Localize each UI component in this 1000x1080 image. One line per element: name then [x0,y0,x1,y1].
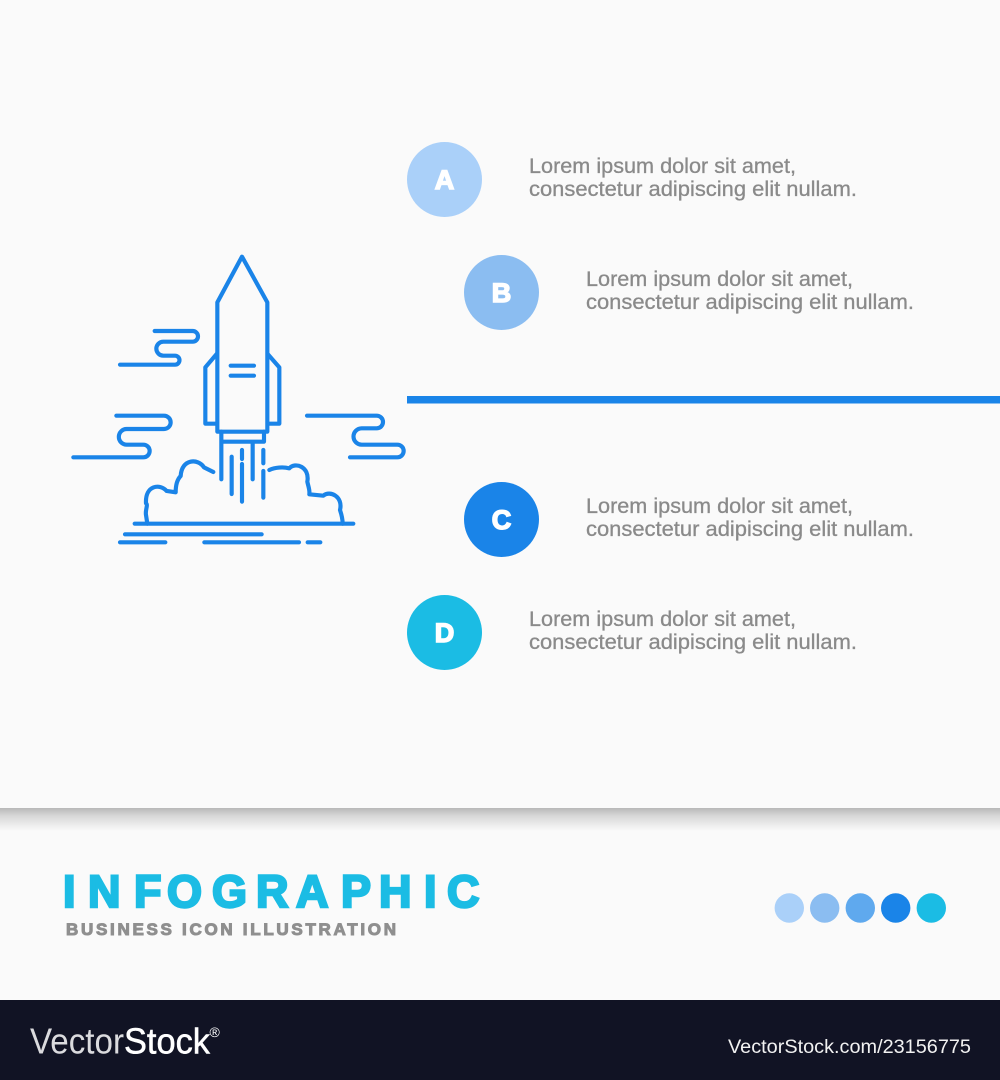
badge A [407,142,482,217]
ground lines [120,524,353,542]
text A: consectetur adipiscing elit nullam. [529,178,857,201]
rocket body [217,257,267,432]
colour dots [775,893,946,923]
text B: Lorem ipsum dolor sit amet, [586,268,853,291]
badge D: D [435,618,454,648]
text D: Lorem ipsum dolor sit amet, [529,608,796,631]
icon: rocket launch [73,257,404,542]
footer logo: ® [210,1024,220,1040]
item B [464,255,914,330]
rocket window lines [231,366,254,376]
footer logo: Vector [30,1020,124,1062]
footer url: VectorStock.com/23156775 [728,1036,971,1058]
item A [407,142,857,217]
text D: consectetur adipiscing elit nullam. [529,631,857,654]
text C: Lorem ipsum dolor sit amet, [586,495,853,518]
text B: consectetur adipiscing elit nullam. [586,291,914,314]
wind swirl left [73,416,171,457]
badge C [464,482,539,557]
text A [529,155,857,201]
footer bar [0,1000,1000,1080]
badge B [464,255,539,330]
smoke cloud left [146,461,213,524]
rocket nozzle [221,432,264,479]
text C: consectetur adipiscing elit nullam. [586,518,914,541]
badge D [407,595,482,670]
text D [529,608,857,654]
text C [586,495,914,541]
smoke cloud right [269,465,343,524]
wind swirl right [307,416,404,457]
wind swirl top left [120,331,198,365]
divider line [407,396,1000,404]
exhaust flames [232,450,263,502]
rocket fins [205,354,279,424]
badge B: B [492,278,511,308]
panel divider shadow [0,808,1000,831]
footer logo: Stock [124,1020,211,1062]
text A: Lorem ipsum dolor sit amet, [529,155,796,178]
badge A: A [435,165,454,195]
subtitle: BUSINESS ICON ILLUSTRATION [66,920,396,939]
text B [586,268,914,314]
title: INFOGRAPHIC [63,866,480,917]
footer logo [30,1020,220,1062]
badge C: C [492,505,511,535]
item C [464,482,914,557]
item D [407,595,857,670]
